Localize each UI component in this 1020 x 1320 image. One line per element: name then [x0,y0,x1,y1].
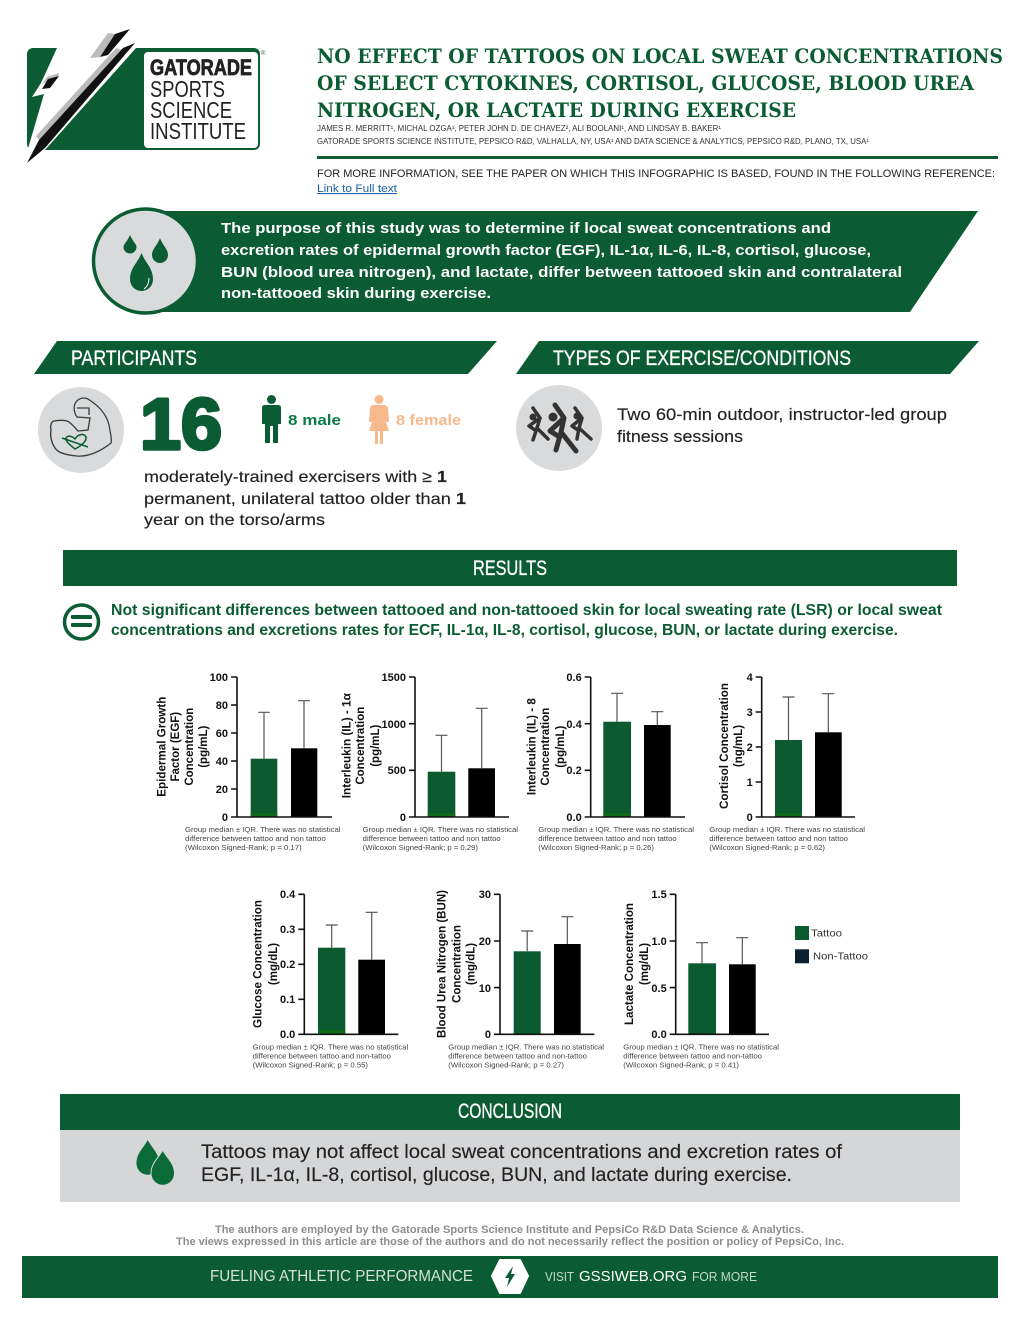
bar chart: cortisol: 1 [747,777,753,789]
icon: equals sign [64,605,98,639]
bar chart: cortisol: difference between tattoo and non tattoo [709,834,848,843]
title [317,44,1003,122]
bar chart: cortisol: (Wilcoxon Signed-Rank; p = 0.62) [709,843,825,852]
bar chart: blood urea nitrogen: Blood Urea Nitrogen (BUN) [437,890,449,1038]
bar chart: IL-1 alpha: 500 [388,765,406,777]
bar chart: EGF: (pg/mL) [198,725,210,768]
bar chart: IL-1 alpha: (Wilcoxon Signed-Rank; p = 0.29) [363,843,478,852]
bar chart: IL-1 alpha: Interleukin (IL) - 1α [342,693,354,798]
bar chart: EGF: Factor (EGF) [170,712,182,782]
bar chart: glucose: difference between tattoo and non-tattoo [253,1052,391,1060]
logo: Gatorade Sports Science Institute: GATORADE [150,55,252,80]
bar chart: cortisol: 4 [747,672,754,684]
bar chart: cortisol [709,672,865,852]
heading: conclusion: CONCLUSION [458,1100,562,1123]
bar chart: glucose: Group median ± IQR. There was no statistical [253,1042,409,1052]
bar chart: glucose: 0.4 [280,889,296,901]
participants description: permanent, unilateral tattoo older than 1 [144,491,466,508]
bar chart: IL-8: 0.4 [566,719,583,731]
logo: Gatorade Sports Science Institute [27,29,266,163]
logo: Gatorade Sports Science Institute: ® [261,50,266,57]
bar chart: glucose: (mg/dL) [268,943,280,985]
title: OF SELECT CYTOKINES, CORTISOL, GLUCOSE, BLOOD UREA [317,71,974,95]
reference note: Link to Full text [317,183,397,195]
bar chart: blood urea nitrogen: (mg/dL) [466,943,478,985]
legend [795,926,868,963]
title: NITROGEN, OR LACTATE DURING EXERCISE [317,98,796,122]
footer band: FUELING ATHLETIC PERFORMANCE [210,1268,473,1285]
bar chart: IL-8: (Wilcoxon Signed-Rank; p = 0.26) [538,843,654,852]
purpose text: BUN (blood urea nitrogen), and lactate, differ between tattooed skin and contralateral [221,264,902,281]
bar chart: lactate: 1.5 [651,889,667,901]
bar chart: IL-1 alpha: Group median ± IQR. There was no statistical [363,825,518,834]
bar chart: lactate: difference between tattoo and non-tattoo [623,1052,762,1060]
purpose text: excretion rates of epidermal growth factor (EGF), IL-1α, IL-6, IL-8, cortisol, glucose, [221,242,871,259]
heading: participants: PARTICIPANTS [71,347,197,370]
bar chart: IL-1 alpha [342,672,518,852]
reference note [317,168,995,195]
footer link text: GSSIWEB.ORG [579,1268,687,1285]
panel: conclusion [60,1130,960,1202]
heading: types of exercise [516,341,979,374]
bar chart: IL-8 [527,672,694,852]
bar chart: IL-8: 0.6 [566,672,582,684]
bar chart: glucose: 0.1 [280,994,295,1006]
bar chart: blood urea nitrogen: difference between tattoo and non-tattoo [448,1052,587,1060]
authors and affiliations [317,124,869,146]
conclusion text: EGF, IL-1α, IL-8, cortisol, glucose, BUN, and lactate during exercise. [201,1165,792,1186]
participants description: moderately-trained exercisers with ≥ 1 [144,469,447,486]
authors and affiliations: JAMES R. MERRITT¹, MICHAL OZGA¹, PETER JOHN D. DE CHAVEZ², ALI BOOLANI¹, AND LINDSAY B. BAKER¹ [317,124,721,133]
bar chart: EGF: Epidermal Growth [157,697,169,797]
stat: 8 female: 8 female [396,412,461,429]
logo: Gatorade Sports Science Institute: SCIENCE [150,97,232,123]
bar chart: blood urea nitrogen: 20 [479,936,491,948]
icon: group fitness [516,385,602,471]
heading: results [63,550,957,586]
bar chart: lactate [623,889,779,1070]
heading: participants [34,341,497,374]
bar chart: blood urea nitrogen: Group median ± IQR. There was no statistical [448,1042,604,1052]
stat: 16 participants: 16 [140,385,222,465]
bar chart: cortisol: 0 [747,812,753,824]
bar chart: EGF: 0 [222,812,228,824]
bar chart: EGF: Concentration [184,708,196,786]
bar chart: EGF: 80 [216,700,228,712]
bar chart: EGF: Group median ± IQR. There was no statistical [185,825,341,834]
bar chart: EGF: 20 [216,784,228,796]
bar chart: lactate: 1.0 [651,936,667,948]
disclaimer: The views expressed in this article are those of the authors and do not necessarily reflect the position or policy of PepsiCo, Inc. [176,1236,844,1248]
bar chart: glucose: 0.3 [280,924,295,936]
bar chart: EGF: 60 [216,728,228,740]
bar chart: lactate: 0.0 [651,1029,667,1041]
bar chart: blood urea nitrogen [437,889,604,1070]
footer band [22,1256,998,1298]
footer link text [545,1268,757,1285]
bar chart: blood urea nitrogen: Concentration [452,925,464,1003]
exercise description: Two 60-min outdoor, instructor-led group [617,405,947,424]
bar chart: IL-1 alpha: 1500 [382,672,406,684]
icon: tattooed arm [38,387,124,473]
exercise description [617,405,947,446]
results summary: Not significant differences between tattooed and non-tattooed skin for local sweating rate (LSR) or local sweat [111,602,942,619]
conclusion text [201,1142,843,1186]
bar chart: blood urea nitrogen: 10 [479,983,491,995]
logo: Gatorade Sports Science Institute: INSTITUTE [150,118,246,144]
legend: Non-Tattoo [813,952,868,962]
authors and affiliations: GATORADE SPORTS SCIENCE INSTITUTE, PEPSICO R&D, VALHALLA, NY, USA¹ AND DATA SCIENCE & ANALYTICS, PEPSICO R&D, PLANO, TX, USA¹ [317,137,869,146]
disclaimer [176,1224,844,1248]
bar chart: EGF: difference between tattoo and non tattoo [185,834,326,843]
bar chart: glucose: 0.2 [280,959,295,971]
bar chart: IL-8: difference between tattoo and non tattoo [538,834,677,843]
bar chart: lactate: (Wilcoxon Signed-Rank; p = 0.41) [623,1060,739,1070]
purpose text [221,220,902,302]
icon: female figure [369,395,389,444]
bar chart: cortisol: 2 [747,742,753,754]
results summary [111,602,942,639]
bar chart: IL-8: Concentration [540,708,552,786]
bar chart: blood urea nitrogen: 0 [485,1029,491,1041]
bar chart: IL-1 alpha: Concentration [355,707,367,785]
icon: sweat drops [94,209,198,313]
bar chart: EGF: 40 [216,756,228,768]
bar chart: IL-1 alpha: 1000 [382,719,406,731]
bar chart: IL-8: 0.2 [566,765,582,777]
bar chart: cortisol: Group median ± IQR. There was no statistical [709,825,865,834]
conclusion text: Tattoos may not affect local sweat concentrations and excretion rates of [201,1142,843,1163]
icon: hexagon bolt [492,1260,528,1293]
footer link text: VISIT [545,1269,574,1284]
heading: conclusion [60,1094,960,1130]
bar chart: blood urea nitrogen: 30 [479,889,491,901]
footer link text: FOR MORE [692,1269,757,1284]
bar chart: glucose: Glucose Concentration [253,900,265,1028]
results summary: concentrations and excretions rates for ECF, IL-1α, IL-8, cortisol, glucose, BUN, or lactate during exercise. [111,622,898,639]
panel: purpose banner [94,209,978,313]
legend: Tattoo [811,928,842,940]
logo: Gatorade Sports Science Institute: SPORTS [150,76,225,102]
bar chart: IL-8: Group median ± IQR. There was no statistical [538,825,694,834]
heading: results: RESULTS [473,557,547,580]
bar chart: cortisol: Cortisol Concentration [719,683,731,809]
purpose text: non-tattooed skin during exercise. [221,285,491,302]
bar chart: IL-1 alpha: (pg/mL) [370,724,382,767]
bar chart: glucose: (Wilcoxon Signed-Rank; p = 0.55) [253,1060,368,1070]
bar chart: glucose: 0.0 [280,1029,295,1041]
stat: 8 male: 8 male [288,412,341,429]
bar chart: lactate: (mg/dL) [639,943,651,985]
disclaimer: The authors are employed by the Gatorade Sports Science Institute and PepsiCo R&D Data Science & Analytics. [215,1224,804,1236]
bar chart: IL-1 alpha: difference between tattoo and non tattoo [363,834,501,843]
bar chart: cortisol: 3 [747,707,753,719]
bar chart: lactate: Lactate Concentration [624,903,636,1025]
participants description [144,469,466,529]
bar chart: lactate: Group median ± IQR. There was no statistical [623,1042,779,1052]
icon: two drops [136,1140,174,1185]
bar chart: IL-8: (pg/mL) [555,725,567,768]
bar chart: lactate: 0.5 [651,983,667,995]
bar chart: cortisol: (ng/mL) [733,725,745,767]
exercise description: fitness sessions [617,427,743,446]
icon: male figure [262,395,281,443]
participants description: year on the torso/arms [144,512,325,529]
bar chart: EGF: 100 [210,672,228,684]
heading: types of exercise: TYPES OF EXERCISE/CONDITIONS [553,347,851,370]
bar chart: IL-1 alpha: 0 [400,812,406,824]
bar chart: EGF: (Wilcoxon Signed-Rank; p = 0.17) [185,843,302,852]
reference note: FOR MORE INFORMATION, SEE THE PAPER ON WHICH THIS INFOGRAPHIC IS BASED, FOUND IN THE FOLLOWING REFERENCE: [317,168,995,180]
bar chart: IL-8: 0.0 [566,812,582,824]
bar chart: IL-8: Interleukin (IL) - 8 [527,698,539,795]
bar chart: EGF [157,672,341,852]
bar chart: glucose [253,889,409,1070]
purpose text: The purpose of this study was to determine if local sweat concentrations and [221,220,831,237]
bar chart: blood urea nitrogen: (Wilcoxon Signed-Rank; p = 0.27) [448,1060,564,1070]
